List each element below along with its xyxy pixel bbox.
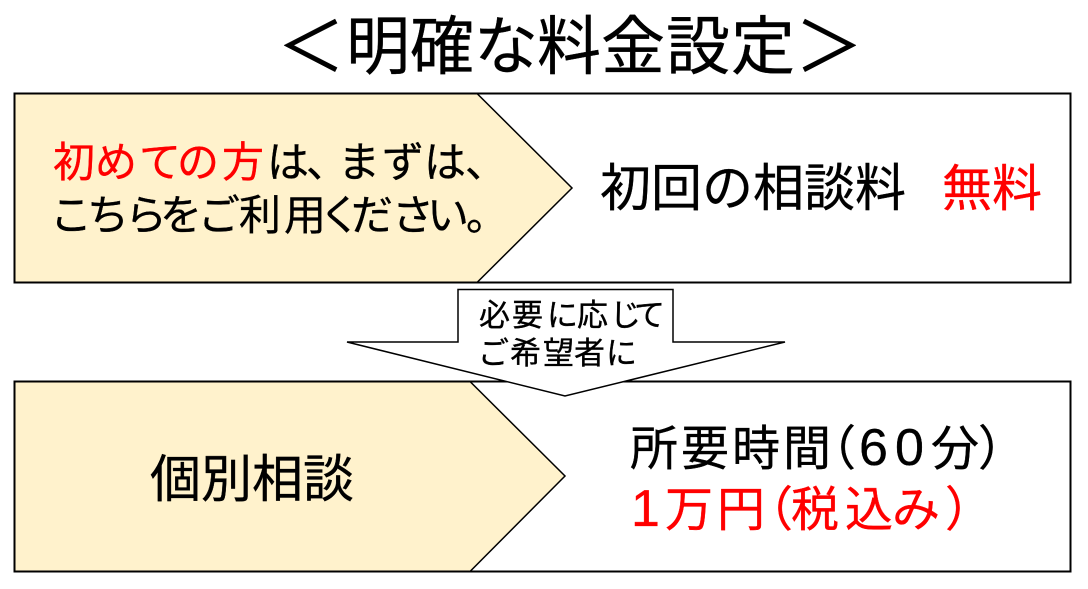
- panel outline top: [14, 382, 1070, 572]
- panel: first consultation: [14, 94, 1070, 282]
- pentagon text: こちらをご利用ください。: [50, 192, 508, 239]
- title: ＜: [277, 10, 345, 86]
- down arrow callout: [347, 290, 785, 396]
- label: first consultation fee: 初回の相談料: [600, 160, 906, 217]
- pentagon text: 初めての方: [53, 139, 264, 186]
- duration: 分）: [931, 423, 1026, 476]
- panel outline: [14, 94, 1070, 282]
- price: free: 無料: [942, 161, 1042, 217]
- pentagon arrow: [14, 94, 572, 282]
- panel: individual consultation: [14, 382, 1070, 572]
- duration: 60: [859, 419, 924, 477]
- callout text: [478, 298, 665, 371]
- duration: 所要時間（: [630, 423, 856, 476]
- callout text: 必要に応じて: [479, 298, 665, 333]
- price: 1: [631, 480, 660, 538]
- pentagon text: 個別相談: [150, 451, 354, 508]
- pentagon text: [50, 139, 508, 239]
- pentagon arrow: [14, 382, 565, 572]
- arrow shape: [347, 290, 785, 396]
- panel outline: [14, 382, 1070, 572]
- callout text: ご希望者に: [478, 336, 637, 371]
- title: ＞: [795, 10, 863, 86]
- title: 明確な料金設定: [346, 11, 795, 83]
- pentagon text: は、まずは、: [267, 139, 507, 186]
- panel outline top: [14, 94, 1070, 282]
- price: 万円（税込み）: [665, 484, 993, 537]
